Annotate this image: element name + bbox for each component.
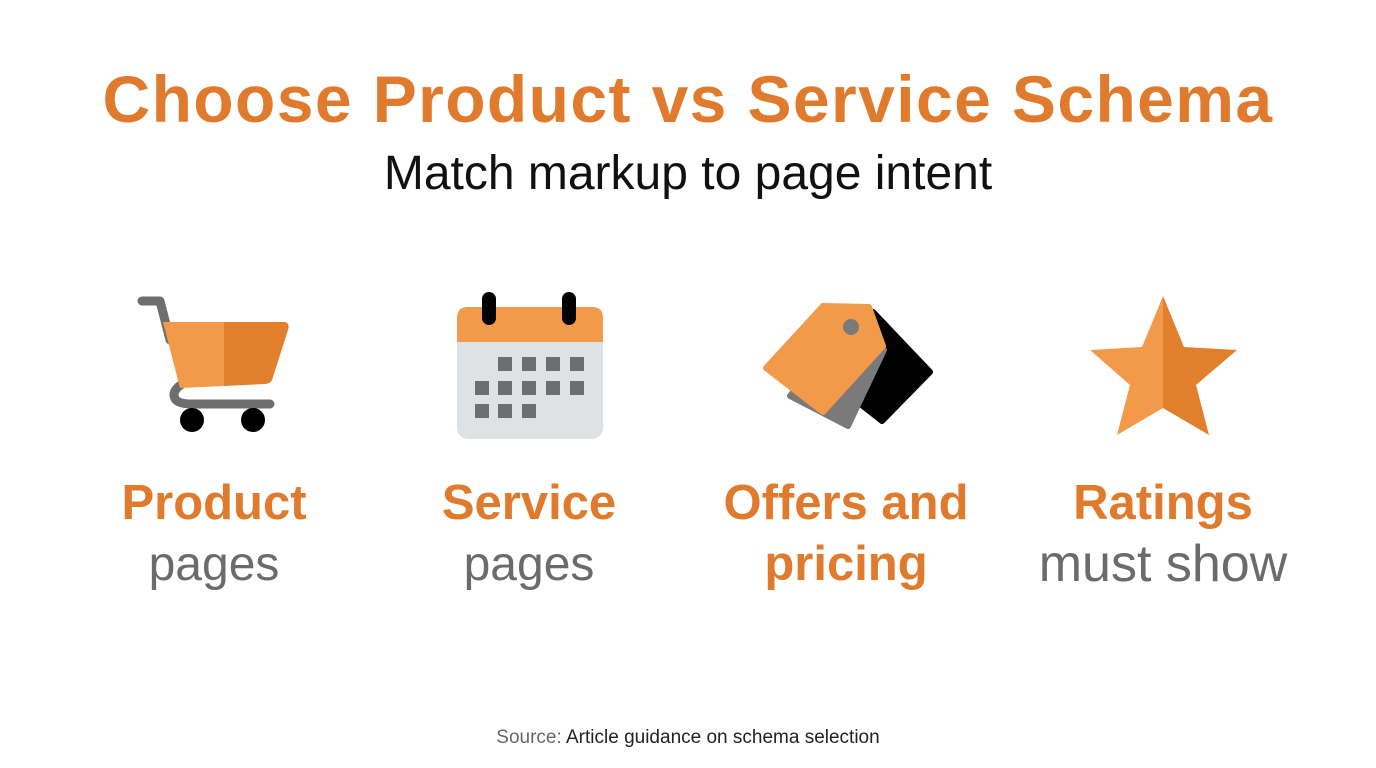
icon: price tags <box>766 306 930 426</box>
icon: calendar <box>457 292 603 439</box>
label: offers and pricing: Offers and <box>723 476 969 530</box>
source: Source: Article guidance on schema selection <box>496 727 880 748</box>
label: service pages <box>442 476 616 591</box>
title: Choose Product vs Service Schema <box>103 62 1273 136</box>
label: offers and pricing: pricing <box>764 537 928 591</box>
label: product pages: pages <box>149 538 279 591</box>
label: service pages: Service <box>442 476 616 530</box>
label: ratings must show: Ratings <box>1073 476 1253 530</box>
icon: star <box>1090 296 1237 435</box>
label: service pages: pages <box>464 538 594 591</box>
label: product pages <box>121 476 307 591</box>
label: ratings must show <box>1039 476 1288 593</box>
icon: shopping cart <box>142 301 289 432</box>
label: ratings must show: must show <box>1039 535 1287 593</box>
label: product pages: Product <box>121 476 307 530</box>
label: offers and pricing <box>723 476 969 591</box>
subtitle: Match markup to page intent <box>384 147 992 200</box>
